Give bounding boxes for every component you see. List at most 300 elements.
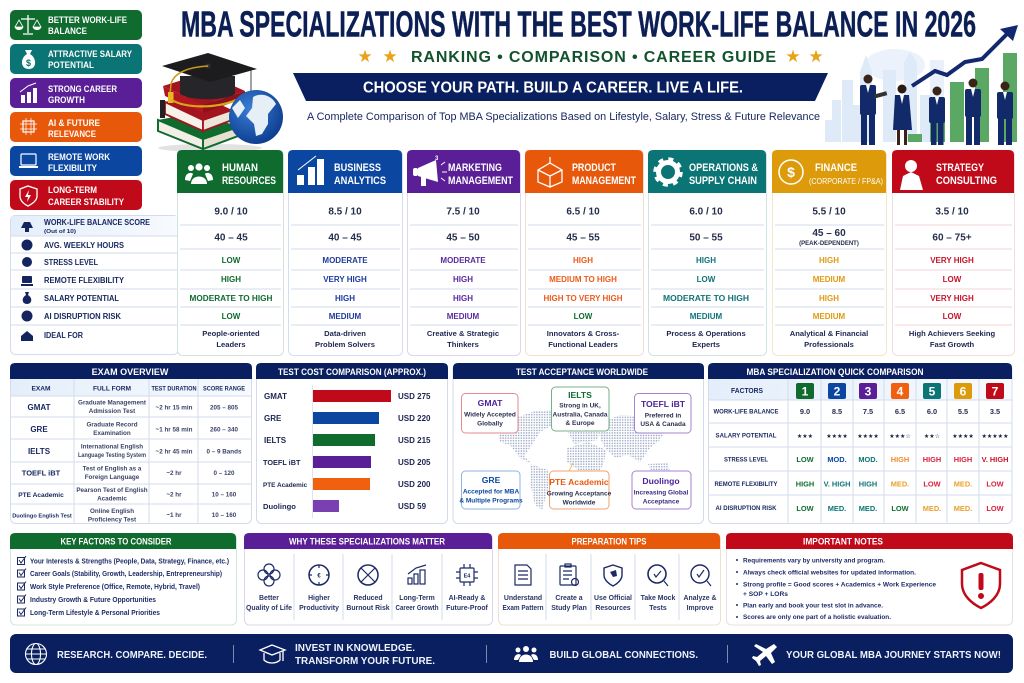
column: product management: Functional Leaders: [548, 340, 618, 349]
pill: remote work flexibility: FLEXIBILITY: [48, 163, 97, 173]
column: human resources: LOW: [222, 312, 241, 321]
item: take mock tests: Take Mock: [641, 595, 676, 602]
balance scores: 6.0: [927, 407, 937, 416]
factor labels: WORK-LIFE BALANCE: [714, 408, 779, 416]
column: product management: LOW: [574, 312, 593, 321]
item: AI-ready and future-proof: AI-Ready &: [449, 595, 485, 602]
column: product management: MANAGEMENT: [572, 175, 636, 187]
bar chart: TOEFL iBT: [263, 458, 301, 467]
item: understand exam pattern: Understand: [504, 595, 542, 602]
salary stars: ★★☆: [924, 433, 940, 440]
score ranges: 205 – 805: [210, 404, 239, 412]
column: finance: Analytical & Financial: [790, 329, 868, 338]
number badges: FACTORS: [731, 386, 763, 395]
remote values: LOW: [986, 480, 1004, 488]
column: marketing management: Creative & Strategic: [427, 329, 499, 338]
callout: PTE Academic: Worldwide: [563, 500, 596, 506]
salary stars: ★★★☆: [889, 433, 911, 440]
number badges: 2: [834, 384, 841, 398]
icon: warning shield: [962, 563, 1000, 608]
icon: network of people: [514, 646, 538, 662]
column: strategy consulting: 3.5 / 10: [935, 206, 969, 218]
notes list: [736, 558, 936, 621]
number badges: 4: [897, 384, 904, 398]
number badges: 5: [929, 384, 936, 398]
item: create a study plan: Create a: [555, 595, 583, 602]
column: strategy consulting: STRATEGY: [936, 162, 985, 174]
item: higher productivity: Higher: [308, 595, 330, 602]
column: marketing management: 7.5 / 10: [446, 206, 480, 218]
item: reduced burnout risk: [346, 565, 390, 612]
item: take mock tests: Tests: [649, 605, 667, 612]
balance scores: 7.5: [863, 407, 873, 416]
bar chart: IELTS: [264, 436, 287, 445]
score ranges: 0 – 9 Bands: [206, 448, 242, 456]
column: strategy consulting: VERY HIGH: [930, 256, 974, 265]
number badges: [731, 383, 1004, 399]
pill: long-term career stability: LONG-TERM: [48, 185, 97, 195]
item: analyze and improve: Analyze &: [684, 595, 716, 602]
row labels: AI DISRUPTION RISK: [44, 312, 121, 321]
column: finance: 5.5 / 10: [812, 206, 846, 218]
connector to PTE callout: [569, 463, 573, 471]
column: human resources: People-oriented: [202, 329, 260, 338]
row labels: AVG. WEEKLY HOURS: [44, 241, 125, 250]
AI risk values: MED.: [828, 504, 846, 513]
footer banner: BUILD GLOBAL CONNECTIONS.: [550, 649, 698, 661]
column: operations and supply chain: 50 – 55: [689, 232, 723, 244]
panel: preparation tips: [498, 533, 720, 625]
subtitle ranking row: RANKING • COMPARISON • CAREER GUIDE: [411, 49, 776, 66]
tagline banner: [293, 73, 828, 101]
column: finance: HIGH: [819, 294, 839, 303]
score ranges: 0 – 120: [213, 470, 235, 477]
callout: TOEFL iBT: Preferred in: [645, 412, 681, 420]
column: human resources: RESOURCES: [222, 175, 276, 187]
stress values: HIGH: [891, 455, 909, 464]
column: product management: 45 – 55: [566, 232, 600, 244]
column: marketing management: MEDIUM: [447, 312, 480, 321]
number badges: 6: [960, 384, 967, 398]
icon: dollar coin: $: [787, 164, 795, 180]
column: human resources: [177, 150, 284, 356]
column: business analytics: [288, 150, 402, 356]
factor labels: STRESS LEVEL: [724, 456, 768, 464]
column: finance: (CORPORATE / FP&A): [809, 176, 883, 186]
exam names: [12, 403, 72, 520]
checklist: [18, 556, 230, 617]
callout: GMAT: Globally: [477, 420, 503, 428]
panel: test acceptance worldwide: [453, 363, 704, 524]
item: better quality of life: Quality of Life: [246, 605, 292, 612]
callout: Duolingo: Increasing Global: [634, 490, 688, 496]
checklist: Your Interests & Strengths (People, Data, Strategy, Finance, etc.): [30, 556, 230, 566]
item: analyze and improve: Improve: [687, 605, 714, 612]
column: strategy consulting: Fast Growth: [930, 340, 975, 349]
footer banner: RESEARCH. COMPARE. DECIDE.: [57, 649, 207, 661]
test durations: ~2 hr 15 min: [156, 404, 193, 412]
bar chart: Duolingo: [263, 502, 296, 511]
column: finance: (PEAK-DEPENDENT): [799, 241, 859, 247]
item: use official resources: [594, 565, 632, 612]
panel: MBA specialization quick comparison: MBA SPECIALIZATION QUICK COMPARISON: [746, 367, 924, 377]
subtitle ranking row: ★: [357, 47, 373, 66]
stress values: HIGH: [954, 455, 972, 464]
pill: long-term career stability: [10, 180, 142, 210]
item: long-term career growth: Long-Term: [399, 595, 435, 602]
item: reduced burnout risk: Burnout Risk: [346, 605, 390, 612]
column: product management: HIGH TO VERY HIGH: [544, 294, 623, 303]
panel: test cost comparison: [256, 363, 448, 524]
notes list: Scores are only one part of a holistic evaluation.: [743, 614, 891, 621]
callout: GRE: [459, 471, 523, 509]
icon: dollar coin: [779, 160, 803, 184]
dotted world map: [498, 410, 670, 510]
bar chart: USD 59: [398, 502, 427, 511]
column: human resources: Leaders: [216, 340, 246, 349]
subtitle ranking row: ★: [808, 47, 824, 66]
pill: attractive salary potential: ATTRACTIVE SALARY: [48, 49, 132, 59]
checklist: Work Style Preference (Office, Remote, Hybrid, Travel): [30, 582, 201, 591]
column: operations and supply chain: Experts: [692, 340, 720, 349]
column: strategy consulting: 60 – 75+: [932, 232, 972, 244]
full forms: Admission Test: [89, 408, 136, 415]
full forms: Proficiency Test: [88, 516, 137, 524]
remote values: HIGH: [796, 480, 814, 488]
column: marketing management: 45 – 50: [446, 232, 480, 244]
pill: AI and future relevance: [10, 112, 142, 142]
column: strategy consulting: CONSULTING: [936, 175, 997, 187]
subtitle ranking row: ★: [785, 47, 801, 66]
test durations: ~2 hr: [166, 492, 182, 498]
score ranges: 10 – 160: [212, 512, 237, 519]
stress values: [796, 455, 1008, 464]
row labels: (Out of 10): [44, 229, 76, 235]
salary stars: ★★★★: [952, 433, 974, 440]
pill: attractive salary potential: POTENTIAL: [48, 60, 94, 70]
callout: GMAT: GMAT: [478, 398, 503, 408]
icon: megaphone: 3: [435, 156, 439, 162]
column: finance: HIGH: [819, 256, 839, 265]
footer banner: [10, 634, 1013, 673]
footer banner: YOUR GLOBAL MBA JOURNEY STARTS NOW!: [786, 649, 1001, 661]
full forms: Pearson Test of English: [76, 487, 148, 494]
item: higher productivity: [299, 565, 339, 612]
illustration: city skyline, growth chart and business people: [825, 25, 1018, 145]
item: AI-ready and future-proof: [446, 564, 489, 612]
item: higher productivity: Productivity: [299, 605, 339, 612]
number badges: 1: [802, 384, 809, 398]
balance scores: 5.5: [958, 407, 968, 416]
panel: exam overview: [10, 363, 252, 524]
salary stars: ★★★: [797, 433, 813, 440]
pill: attractive salary potential: [10, 44, 142, 74]
full forms: Online English: [90, 508, 134, 515]
test durations: ~1 hr: [166, 512, 182, 519]
panel: important notes: IMPORTANT NOTES: [803, 536, 883, 546]
checklist: Long-Term Lifestyle & Personal Priorities: [30, 608, 160, 617]
item: use official resources: Use Official: [594, 595, 632, 602]
test durations: ~2 hr: [166, 470, 182, 477]
panel: MBA specialization quick comparison: [708, 363, 1012, 524]
column: product management: Innovators & Cross-: [547, 329, 620, 338]
salary stars: [797, 433, 1008, 440]
item: long-term career growth: Career Growth: [396, 605, 438, 612]
icon: megaphone: [413, 156, 447, 186]
pill: remote work flexibility: [10, 146, 142, 176]
exam names: GMAT: [28, 403, 51, 412]
table header row: EXAM: [31, 386, 51, 392]
item: understand exam pattern: [502, 565, 544, 612]
column: finance: [772, 150, 886, 356]
column: operations and supply chain: MODERATE TO HIGH: [663, 294, 749, 303]
footer banner: INVEST IN KNOWLEDGE.: [295, 642, 415, 654]
exam names: IELTS: [28, 447, 51, 456]
salary stars: ★★★★: [857, 433, 879, 440]
callout: TOEFL iBT: TOEFL iBT: [641, 399, 686, 409]
column: marketing management: HIGH: [453, 275, 473, 284]
factor labels: SALARY POTENTIAL: [716, 432, 776, 440]
column: product management: HIGH: [573, 256, 593, 265]
column: finance: Professionals: [804, 340, 854, 349]
checklist: Career Goals (Stability, Growth, Leadership, Entrepreneurship): [30, 569, 223, 578]
column: marketing management: MARKETING: [448, 162, 502, 174]
item: long-term career growth: [396, 565, 438, 612]
test durations: ~1 hr 58 min: [156, 426, 193, 434]
stress values: MOD.: [827, 455, 847, 464]
column: operations and supply chain: Process & Operations: [666, 329, 746, 338]
callout: IELTS: & Europe: [566, 420, 595, 427]
panel: exam overview: EXAM OVERVIEW: [92, 367, 169, 377]
table header row: SCORE RANGE: [203, 386, 246, 392]
row icons: [21, 222, 33, 341]
icon: consultant: [900, 160, 923, 190]
remote values: V. HIGH: [824, 480, 850, 488]
item: create a study plan: Study Plan: [551, 605, 587, 612]
illustration: graduation cap, books and globe: [158, 53, 283, 152]
column: finance: MEDIUM: [813, 312, 846, 321]
column: strategy consulting: VERY HIGH: [930, 294, 974, 303]
AI risk values: MED.: [923, 504, 941, 513]
test durations: ~2 hr 45 min: [156, 448, 193, 456]
pill: attractive salary potential: $: [26, 58, 31, 68]
panel: important notes: [726, 533, 1013, 625]
balance scores: 6.5: [895, 407, 905, 416]
bar chart: USD 200: [398, 480, 431, 489]
AI risk values: [796, 504, 1004, 513]
stress values: LOW: [796, 455, 814, 464]
column: business analytics: Data-driven: [324, 329, 366, 338]
notes list: + SOP + LORs: [743, 591, 788, 598]
icon: gear: [655, 159, 681, 185]
full forms: Graduate Record: [86, 422, 138, 428]
column: operations and supply chain: HIGH: [696, 256, 716, 265]
column: strategy consulting: LOW: [943, 275, 962, 284]
item: AI-ready and future-proof: Future-Proof: [446, 605, 489, 612]
column: product management: 6.5 / 10: [566, 206, 600, 218]
column: business analytics: HIGH: [335, 294, 355, 303]
bar chart: GRE: [264, 414, 282, 423]
column: strategy consulting: High Achievers Seeking: [909, 329, 995, 338]
icon: people: [185, 163, 213, 184]
table header row: [31, 386, 246, 392]
panel: key factors to consider: [10, 533, 236, 625]
column: business analytics: MEDIUM: [329, 312, 362, 321]
pill: remote work flexibility: REMOTE WORK: [48, 152, 110, 162]
callout: IELTS: [552, 387, 609, 431]
bar chart: USD 215: [398, 436, 431, 445]
bar chart: GMAT: [264, 392, 287, 401]
callout: Duolingo: [632, 471, 691, 509]
comparison row labels panel: [10, 216, 178, 354]
column: human resources: LOW: [222, 256, 241, 265]
column: business analytics: ANALYTICS: [334, 175, 386, 187]
full forms: Foreign Language: [85, 474, 140, 481]
column: operations and supply chain: LOW: [697, 275, 716, 284]
pill: better work-life balance: [10, 10, 142, 40]
full forms: Academic: [97, 496, 127, 502]
callout: Duolingo: Acceptance: [643, 498, 680, 506]
notes list: Strong profile = Good scores + Academics + Work Experience: [743, 582, 936, 588]
full forms: Test of English as a: [83, 466, 142, 472]
full forms: Graduate Management: [78, 400, 147, 406]
table header row: FULL FORM: [93, 386, 131, 392]
item: create a study plan: [551, 564, 587, 612]
callout: PTE Academic: PTE Academic: [549, 477, 609, 487]
column: human resources: HUMAN: [222, 162, 258, 174]
column: strategy consulting: [892, 150, 1014, 356]
callout: PTE Academic: Growing Acceptance: [547, 490, 612, 498]
bar chart: USD 220: [398, 414, 431, 423]
exam names: Duolingo English Test: [12, 514, 72, 520]
test durations: [156, 404, 193, 519]
icon: globe: [26, 644, 46, 664]
callout: TOEFL iBT: [634, 394, 691, 433]
column: finance: FINANCE: [815, 162, 857, 174]
bar chart: [263, 385, 431, 518]
item: understand exam pattern: Exam Pattern: [502, 605, 544, 612]
item: higher productivity: €: [317, 574, 321, 580]
table header row: TEST DURATION: [152, 386, 197, 392]
exam names: PTE Academic: [18, 492, 64, 499]
column: human resources: 9.0 / 10: [214, 206, 248, 218]
item: use official resources: Resources: [595, 605, 631, 612]
item: AI-ready and future-proof: E4: [464, 574, 471, 580]
number badges: 3: [865, 384, 872, 398]
notes list: Always check official websites for updated information.: [743, 570, 916, 576]
pill: strong career growth: [10, 78, 142, 108]
remote values: LOW: [923, 480, 941, 488]
bar chart: PTE Academic: [263, 482, 308, 489]
column: business analytics: Problem Solvers: [315, 340, 375, 349]
pill: strong career growth: STRONG CAREER: [48, 84, 117, 94]
full forms: Language Testing System: [78, 452, 146, 459]
column: marketing management: HIGH: [453, 294, 473, 303]
column: operations and supply chain: OPERATIONS &: [689, 162, 758, 174]
tagline banner: CHOOSE YOUR PATH. BUILD A CAREER. LIVE A LIFE.: [363, 80, 743, 96]
exam names: TOEFL iBT: [22, 468, 61, 478]
column: business analytics: MODERATE: [322, 256, 368, 265]
row labels: WORK-LIFE BALANCE SCORE: [44, 218, 151, 227]
footer banner: TRANSFORM YOUR FUTURE.: [295, 655, 435, 667]
balance scores: 8.5: [832, 407, 842, 416]
AI risk values: MED.: [954, 504, 972, 513]
remote values: HIGH: [859, 480, 877, 488]
column: operations and supply chain: 6.0 / 10: [689, 206, 723, 218]
row labels: [44, 218, 151, 340]
callout: TOEFL iBT: USA & Canada: [640, 421, 686, 428]
row labels: IDEAL FOR: [44, 331, 83, 340]
column: operations and supply chain: [648, 150, 766, 356]
notes list: Plan early and book your test slot in advance.: [743, 602, 883, 610]
pill: AI and future relevance: AI & FUTURE: [48, 118, 100, 128]
score ranges: [206, 404, 242, 519]
salary stars: ★★★★★: [982, 433, 1008, 440]
pill: better work-life balance: BALANCE: [48, 26, 87, 36]
row labels: SALARY POTENTIAL: [44, 294, 119, 303]
column: marketing management: Thinkers: [447, 340, 479, 349]
callout: GRE: & Multiple Programs: [459, 498, 523, 504]
AI risk values: LOW: [796, 504, 814, 513]
item: analyze and improve: [684, 565, 716, 612]
stress values: HIGH: [923, 455, 941, 464]
subtitle ranking row: ★: [382, 47, 398, 66]
panel: why these specializations matter: WHY THESE SPECIALIZATIONS MATTER: [289, 536, 445, 546]
panel: test cost comparison: TEST COST COMPARISON (APPROX.): [278, 367, 426, 377]
panel: preparation tips: PREPARATION TIPS: [572, 536, 646, 546]
factor labels: [714, 408, 779, 512]
item: better quality of life: [246, 564, 292, 612]
callout: GRE: GRE: [482, 475, 501, 485]
callout: GRE: Accepted for MBA: [463, 488, 519, 496]
panel: test acceptance worldwide: TEST ACCEPTANCE WORLDWIDE: [516, 367, 648, 377]
callout: PTE Academic: [547, 471, 612, 509]
column: business analytics: BUSINESS: [334, 162, 381, 174]
icon: box: [538, 157, 562, 187]
pill: long-term career stability: CAREER STABILITY: [48, 197, 124, 207]
panel: why these specializations matter: [244, 533, 492, 625]
callout: IELTS: Australia, Canada: [553, 412, 608, 418]
icon: graduation cap: [260, 645, 285, 663]
column: business analytics: 40 – 45: [328, 232, 362, 244]
pill: AI and future relevance: RELEVANCE: [48, 129, 96, 139]
balance scores: [800, 407, 1000, 416]
panel: key factors to consider: KEY FACTORS TO CONSIDER: [60, 536, 172, 546]
column: marketing management: MANAGEMENT: [448, 175, 513, 187]
salary stars: ★★★★: [826, 433, 848, 440]
column: human resources: HIGH: [221, 275, 241, 284]
row labels: STRESS LEVEL: [44, 258, 98, 267]
icon: bar chart: [297, 156, 324, 185]
AI risk values: MED.: [859, 504, 877, 513]
description line: A Complete Comparison of Top MBA Specializations Based on Lifestyle, Salary, Stress & Future Relevance: [307, 111, 820, 123]
column: business analytics: 8.5 / 10: [328, 206, 362, 218]
exam names: GRE: [30, 425, 48, 434]
column: human resources: MODERATE TO HIGH: [190, 294, 273, 303]
notes list: Requirements vary by university and program.: [743, 558, 885, 564]
full forms: Examination: [93, 430, 131, 437]
number badges: 7: [992, 384, 999, 398]
benefits pill list: [10, 10, 142, 210]
column: human resources: 40 – 45: [214, 232, 248, 244]
callout: GMAT: [462, 394, 518, 433]
callout: IELTS: Strong in UK,: [559, 402, 601, 410]
remote values: MED.: [891, 480, 909, 488]
bar chart: USD 205: [398, 458, 431, 467]
checklist: Industry Growth & Future Opportunities: [30, 595, 156, 604]
column: business analytics: VERY HIGH: [323, 275, 367, 284]
bar chart: USD 275: [398, 392, 431, 401]
